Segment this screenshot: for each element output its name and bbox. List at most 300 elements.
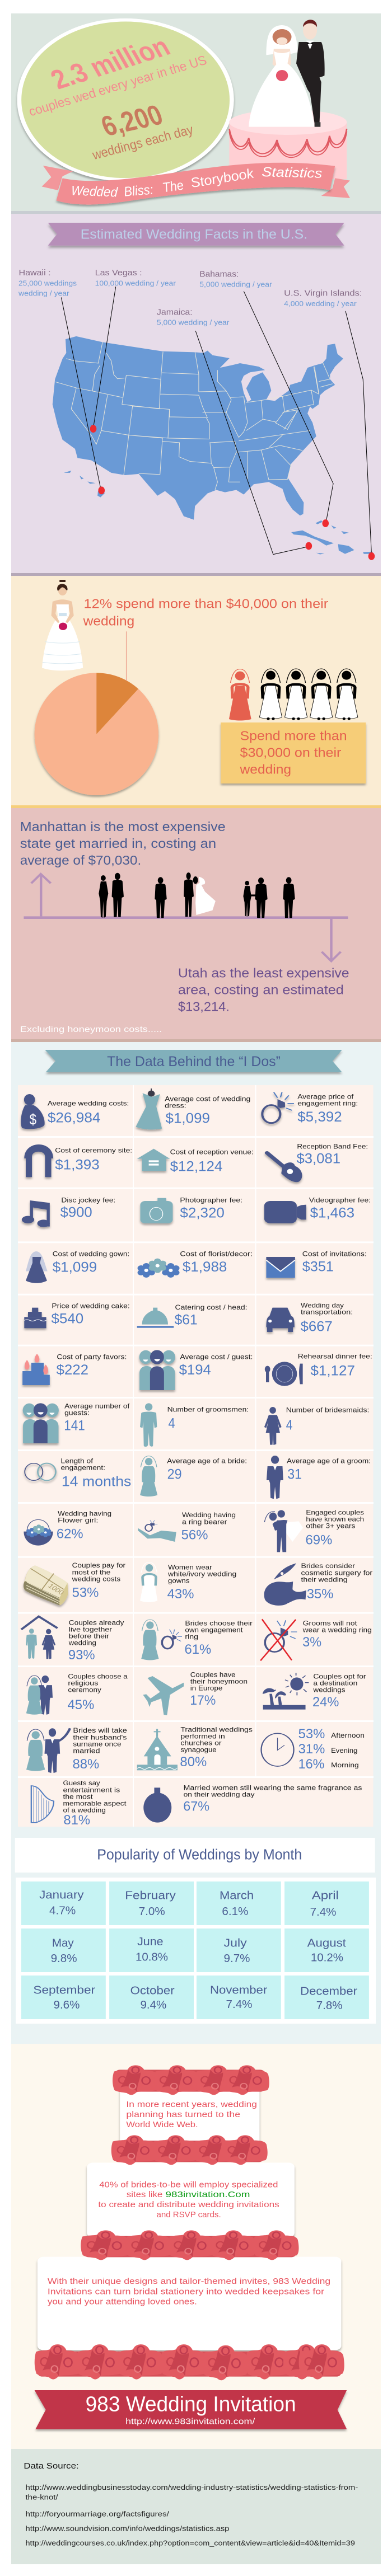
cell: age of groom <box>267 1456 371 1499</box>
cell: grooms no ring <box>260 1619 372 1660</box>
rose trim row 3 <box>81 2230 299 2260</box>
cell: ceremony site: $1,393 <box>55 1157 100 1172</box>
cake tier 2: 983invitation.Com <box>166 2189 250 2199</box>
icon: crossed-out ring <box>260 1619 297 1660</box>
callout: U.S. Virgin Islands: 4,000 wedding / year <box>284 299 357 308</box>
cell: religious ceremony: ceremony <box>68 1687 101 1693</box>
icon: envelope <box>266 1257 295 1278</box>
heading: popularity by month <box>15 1838 375 1873</box>
cell: couples pay: Couples pay for <box>72 1562 126 1569</box>
panel: most and least expensive <box>11 808 381 1042</box>
cell: wedding gown <box>26 1250 129 1283</box>
cell: rehearsal dinner: $1,127 <box>310 1363 355 1378</box>
icon: arch <box>24 1144 53 1177</box>
table: months: September <box>33 1984 95 1996</box>
cake tier 1 <box>120 2078 259 2145</box>
rose trim row 4 <box>35 2344 344 2380</box>
rose trim row 2 <box>111 2135 268 2165</box>
brand banner <box>35 2390 347 2429</box>
icon: video camera <box>264 1201 306 1223</box>
cell: time of day <box>262 1726 365 1772</box>
table: months: February <box>125 1889 176 1902</box>
source links <box>26 2484 358 2547</box>
panel: data behind the I Dos: Catering cost / head: <box>175 1304 248 1311</box>
cell: transportation: transportation: <box>301 1308 353 1316</box>
icon: harp <box>31 1786 54 1823</box>
cell: honeymoon in Europe: 17% <box>190 1693 216 1708</box>
cell: churches or synagogue: performed in <box>180 1733 225 1740</box>
cell: disc jockey: Disc jockey fee: <box>61 1196 115 1204</box>
cell: honeymoon in Europe: their honeymoon <box>190 1678 248 1685</box>
cell: couples pay: most of the <box>72 1569 111 1576</box>
cell: florist: $1,988 <box>183 1259 227 1275</box>
table: months: 9.6% <box>54 1998 80 2011</box>
icon: man <box>140 1403 157 1447</box>
cell: invitations: $351 <box>302 1259 334 1274</box>
panel: data behind the I Dos <box>11 1042 381 2044</box>
table: months: 7.4% <box>310 1906 336 1918</box>
cell: rehearsal dinner <box>265 1353 372 1386</box>
cell: bridesmaids <box>264 1406 369 1445</box>
cell: live together <box>21 1616 124 1663</box>
cell: religious ceremony <box>26 1673 128 1715</box>
table: months: January <box>39 1889 84 1902</box>
cell: destination wedding <box>263 1673 366 1710</box>
cell: engagement ring: Average price of <box>297 1093 353 1100</box>
cell: reception venue <box>137 1148 254 1175</box>
callout: Bahamas <box>199 270 333 527</box>
icon: couple under roof <box>21 1616 58 1659</box>
cell: videographer <box>264 1196 371 1223</box>
cell: time of day: Evening <box>331 1747 357 1754</box>
cell: fragrance: on their wedding day <box>184 1791 255 1798</box>
cell: party favors: $222 <box>56 1362 88 1378</box>
cell: videographer: Videographer fee: <box>309 1196 371 1204</box>
cost line with arrows <box>24 874 348 961</box>
cell: wedding gown: $1,099 <box>53 1260 97 1275</box>
cell: catering: $61 <box>175 1312 198 1327</box>
callout: Hawaii <box>18 269 105 494</box>
table: months: December <box>300 1985 357 1997</box>
cell: time of day: 16% <box>298 1757 324 1772</box>
cell: groomsmen: 4 <box>168 1416 175 1432</box>
icon: music note <box>22 1200 50 1227</box>
cell: couples pay: 53% <box>72 1585 99 1600</box>
cell: entertainment: entertainment is <box>63 1786 120 1794</box>
cell: entertainment: 81% <box>63 1813 90 1828</box>
icon: bride figures <box>229 669 358 720</box>
panel: data behind the I Dos: Price of wedding cake: <box>52 1302 130 1310</box>
cell: cost per guest <box>139 1350 253 1390</box>
callout: Bahamas: Bahamas: <box>199 270 239 279</box>
cake tier 2: to create and distribute wedding invitations <box>98 2199 279 2209</box>
cell: known each other: Engaged couples <box>306 1509 364 1516</box>
cell: take surname: married <box>73 1747 100 1754</box>
cell: videographer: $1,463 <box>310 1205 354 1221</box>
icon: house <box>137 1149 170 1171</box>
cell: destination wedding: 24% <box>312 1695 339 1710</box>
cell: couples pay <box>24 1562 126 1606</box>
cell: ring bearer: 56% <box>181 1528 208 1543</box>
table: months: 7.4% <box>226 1998 252 2011</box>
cell: number of guests: guests: <box>64 1410 90 1416</box>
heading: data source: Data Source: <box>24 2461 79 2470</box>
cake tier 1: In more recent years, wedding <box>126 2099 257 2109</box>
cell: live together: wedding <box>68 1640 96 1646</box>
cell: wedding cake <box>24 1308 83 1328</box>
text: Manhattan: state get married in, costing an <box>20 836 216 851</box>
cell: white gowns: Women wear <box>168 1564 212 1571</box>
brand banner: http://www.983invitation.com/ <box>125 2417 255 2426</box>
cell: churches or synagogue: synagogue <box>180 1747 217 1753</box>
panel: data source <box>11 2449 381 2564</box>
cell: disc jockey: $900 <box>60 1204 92 1220</box>
cell: transportation <box>266 1308 353 1335</box>
cell: white gowns: gowns <box>168 1577 190 1584</box>
title ribbon: Statistics <box>262 165 323 181</box>
cell: flower girl: 62% <box>57 1526 83 1541</box>
icon: groom carrying bride <box>264 1510 303 1552</box>
icon: church <box>137 1729 178 1770</box>
cell: florist: Cost of florist/decor: <box>180 1250 253 1257</box>
cake tier 2: and RSVP cards. <box>156 2209 221 2219</box>
cell: cosmetic surgery: Brides consider <box>301 1563 355 1570</box>
table: months: August <box>307 1937 346 1949</box>
cell: reception band <box>267 1143 368 1182</box>
cell: ring bearer: Wedding having <box>182 1512 236 1519</box>
icon: sun and palm trees <box>263 1673 309 1710</box>
cell: known each other: have known each <box>306 1515 364 1523</box>
icon: money bag: $ <box>30 1111 37 1128</box>
cell: flower girl: Wedding having <box>58 1510 111 1517</box>
icon: bride in white <box>140 1563 157 1602</box>
bride topper <box>249 25 315 127</box>
brand banner: 983 Wedding Invitation <box>86 2392 296 2416</box>
cell: photographer <box>140 1196 242 1223</box>
cell: churches or synagogue: churches or <box>180 1739 222 1747</box>
cake tier 2: 40% of brides-to-be will employ specialized <box>99 2180 278 2189</box>
cell: wedding cake: $540 <box>52 1311 83 1326</box>
cell: cost per guest: $194 <box>179 1362 211 1378</box>
icon: bundle of money <box>24 1565 68 1606</box>
cell: disc jockey <box>22 1196 115 1227</box>
cell: ring bearer: a ring bearer <box>182 1518 227 1526</box>
panel: hero <box>11 13 381 214</box>
cell: take surname: Brides will take <box>73 1727 127 1734</box>
source links: http://foryourmarriage.org/factsfigures/ <box>26 2511 170 2518</box>
source links: the-knot/ <box>26 2494 58 2502</box>
cell: white gowns: 43% <box>167 1587 194 1602</box>
cell: reception venue: $12,124 <box>170 1159 222 1175</box>
table: months: 9.8% <box>51 1952 77 1965</box>
icon: hand with ring <box>138 1521 176 1542</box>
callout: Hawaii: Hawaii : <box>18 269 51 278</box>
cell: length of engagement: engagement: <box>60 1465 105 1471</box>
cell: time of day: 31% <box>298 1742 325 1757</box>
pie chart <box>35 673 158 795</box>
cell: couples pay: wedding costs <box>72 1575 120 1583</box>
cell: length of engagement: Length of <box>60 1457 93 1465</box>
cell: grooms no ring: wear a wedding ring <box>302 1627 372 1634</box>
cell: churches or synagogue <box>137 1726 253 1770</box>
icon: bride in white gown <box>42 580 83 670</box>
cell: cost per guest: Average cost / guest: <box>180 1353 253 1360</box>
cell: invitations: Cost of invitations: <box>302 1250 367 1257</box>
cell: transportation: $667 <box>301 1319 333 1335</box>
icon: car <box>266 1308 295 1332</box>
leader line <box>125 631 127 681</box>
cell: wedding dress: Average cost of wedding <box>165 1095 250 1102</box>
title ribbon: Storybook <box>189 166 256 191</box>
cell: take surname: 88% <box>72 1757 99 1772</box>
cell: average wedding costs: $26,984 <box>48 1110 100 1125</box>
title ribbon <box>42 163 350 205</box>
cake tier 2 <box>87 2162 295 2237</box>
cell: ceremony site <box>24 1144 132 1177</box>
table: months: July <box>224 1937 247 1949</box>
callout: Hawaii: wedding / year <box>18 289 69 297</box>
table: months: 10.8% <box>136 1951 168 1963</box>
panel: data behind the I Dos: Wedding day <box>301 1302 344 1309</box>
table: months: 4.7% <box>49 1904 76 1917</box>
cell: catering <box>137 1308 198 1328</box>
cell: religious ceremony: 45% <box>68 1697 94 1712</box>
cell: entertainment: the most <box>63 1793 93 1800</box>
callout: Jamaica: 5,000 wedding / year <box>157 318 230 326</box>
icon: clock <box>262 1733 294 1766</box>
cell: time of day: Afternoon <box>331 1732 365 1739</box>
cell: party favors <box>22 1353 127 1385</box>
callout: Las Vegas: 100,000 wedding / year <box>95 279 176 287</box>
rose trim row 1 <box>113 2065 269 2095</box>
cell: take surname: surname once <box>73 1740 122 1748</box>
cell: live together: live together <box>69 1626 112 1633</box>
icon: cake <box>24 1308 46 1328</box>
cell: entertainment: memorable aspect <box>63 1800 127 1807</box>
icon: dress <box>136 1088 162 1129</box>
cell: destination wedding: Couples opt for <box>313 1673 366 1680</box>
cell: ring bearer <box>138 1512 236 1543</box>
table: months: 9.4% <box>140 1998 166 2011</box>
cake tier 1: World Wide Web. <box>126 2119 198 2129</box>
cell: entertainment: of a wedding <box>63 1807 106 1814</box>
cell: choose own ring <box>141 1620 253 1660</box>
cell: age of bride <box>140 1456 247 1496</box>
cell: live together: Couples already <box>69 1619 124 1626</box>
note: excluding honeymoon: Excluding honeymoon costs..... <box>20 1024 162 1034</box>
icon: plane <box>143 1676 184 1715</box>
US map <box>53 336 372 555</box>
cell: number of guests: 141 <box>64 1418 85 1434</box>
icon: couple arms raised <box>26 1728 70 1773</box>
cell: cosmetic surgery: 35% <box>307 1587 334 1602</box>
icon: camera <box>140 1198 172 1223</box>
table: months: June <box>137 1935 164 1948</box>
cell: reception band: $3,081 <box>296 1151 340 1167</box>
table: months: April <box>312 1889 339 1902</box>
icon: bride and groom <box>26 1676 53 1715</box>
panel: wedding facts map <box>11 214 381 576</box>
stat circle <box>19 20 232 180</box>
icon: wedding bands <box>25 1463 56 1480</box>
cell: choose own ring: Brides choose their <box>185 1620 253 1627</box>
cell: churches or synagogue: 80% <box>180 1754 207 1770</box>
text: Manhattan: average of $70,030. <box>20 853 141 867</box>
silhouettes: wedding guests and couple <box>99 872 295 918</box>
cell: white gowns <box>140 1563 236 1602</box>
table: months: May <box>52 1937 74 1949</box>
cell: florist <box>138 1250 253 1278</box>
cell: take surname: their husband's <box>73 1734 127 1741</box>
cake <box>229 110 347 179</box>
cell: rehearsal dinner: Rehearsal dinner fee: <box>298 1353 372 1360</box>
cell: entertainment: Guests say <box>63 1780 100 1787</box>
cell: flower girl <box>24 1510 111 1546</box>
cell: ceremony site: Cost of ceremony site: <box>55 1147 132 1154</box>
icon: bundle of money: 1000 <box>46 1583 66 1596</box>
cell: grooms no ring: 3% <box>302 1635 321 1650</box>
icon: groom <box>267 1456 283 1499</box>
cell: fragrance: 67% <box>183 1799 209 1814</box>
cell: choose own ring: 61% <box>184 1642 211 1657</box>
cell: party favors: Cost of party favors: <box>57 1353 127 1360</box>
cell: cosmetic surgery: cosmetic surgery for <box>301 1569 373 1576</box>
callout box: 30,000: Spend more than <box>240 729 347 743</box>
cell: length of engagement <box>25 1457 131 1489</box>
callout: U.S. Virgin Islands <box>284 289 375 560</box>
cell: live together: 93% <box>68 1648 95 1663</box>
cell: age of groom: Average age of a groom: <box>287 1457 371 1465</box>
cell: reception venue: Cost of reception venue: <box>170 1148 254 1156</box>
cake tier 3 <box>38 2257 341 2350</box>
stat circle: 6,200 <box>97 99 167 142</box>
text: Manhattan <box>20 819 226 867</box>
icon: candles <box>22 1354 50 1385</box>
cell: flower girl: Flower girl: <box>58 1517 98 1524</box>
cell: honeymoon in Europe: in Europe <box>190 1685 223 1692</box>
icon: guests <box>23 1403 59 1443</box>
cell: engagement ring: $5,392 <box>297 1109 342 1125</box>
table: months <box>16 1878 376 2024</box>
text: 12 percent: wedding <box>83 613 134 628</box>
cell: live together: before their <box>69 1632 110 1640</box>
cake tier 3: With their unique designs and tailor-themed invites, 983 Wedding <box>48 2276 330 2286</box>
cell: age of bride: 29 <box>167 1467 182 1482</box>
text: Utah <box>178 966 349 1014</box>
icon: flower basket <box>24 1519 53 1546</box>
heading banner: Estimated Wedding Facts in the U.S. <box>81 227 307 242</box>
text: Utah: area, costing an estimated <box>178 983 344 997</box>
title ribbon: Wedded <box>71 183 119 200</box>
panel: spending <box>11 576 381 808</box>
cell: bridesmaids: Number of bridesmaids: <box>286 1406 369 1414</box>
text: 12 percent: 12% spend more than $40,000 on their <box>84 597 328 611</box>
cell: age of groom: 31 <box>287 1467 302 1482</box>
cell: engagement ring: engagement ring: <box>297 1100 358 1107</box>
callout: U.S. Virgin Islands: U.S. Virgin Islands: <box>284 289 362 298</box>
cell: honeymoon in Europe <box>143 1671 248 1715</box>
icon: perfume bottle <box>143 1787 171 1823</box>
table: months: October <box>130 1984 175 1997</box>
cell: known each other <box>264 1509 364 1552</box>
source links: http://www.soundvision.com/info/weddings/statistics.asp <box>26 2525 229 2533</box>
icon: cosmetic surgery <box>264 1563 306 1606</box>
cake tier 1: planning has turned to the <box>126 2109 240 2119</box>
cell: fragrance <box>143 1784 362 1823</box>
cell: cosmetic surgery <box>264 1563 373 1606</box>
cake tier 3: you and your attending loved ones. <box>48 2297 197 2306</box>
stat circle: couples wed every year in the US <box>26 53 209 119</box>
cell: average wedding costs: Average wedding costs: <box>48 1100 129 1107</box>
cell: engagement ring <box>262 1092 358 1125</box>
cell: honeymoon in Europe: Couples have <box>190 1671 236 1678</box>
cell: invitations <box>266 1250 367 1278</box>
callout: Bahamas: 5,000 wedding / year <box>199 280 272 289</box>
text: Utah: $13,214. <box>178 1000 230 1014</box>
table: months: 10.2% <box>311 1951 343 1964</box>
cell: take surname <box>26 1727 127 1773</box>
heading banner: The Data Behind the “I Dos” <box>107 1054 281 1069</box>
table: months: 9.7% <box>224 1952 250 1965</box>
heading banner <box>48 223 344 246</box>
callout: Las Vegas: Las Vegas : <box>95 269 142 278</box>
cell: white gowns: white/ivory wedding <box>167 1570 236 1578</box>
title ribbon: Bliss: <box>123 182 155 200</box>
callout: Las Vegas <box>90 269 176 433</box>
table: months: March <box>220 1889 254 1902</box>
stat circle: weddings each day <box>89 122 197 162</box>
cell: religious ceremony: Couples choose a <box>68 1673 128 1680</box>
cell: choose own ring: own engagement <box>185 1627 243 1634</box>
icon: bride <box>140 1456 157 1496</box>
icon: ring <box>262 1092 294 1123</box>
cell: cosmetic surgery: their wedding <box>301 1576 348 1583</box>
cell: wedding dress: dress: <box>165 1102 186 1109</box>
table: months: 7.0% <box>139 1905 165 1918</box>
cell: photographer: $2,320 <box>180 1205 225 1221</box>
icon: woman <box>264 1407 282 1445</box>
cell: length of engagement: 14 months <box>62 1474 131 1489</box>
text: Utah: Utah as the least expensive <box>178 966 349 980</box>
callout box: 30,000: wedding <box>240 762 291 777</box>
icon: cloche <box>137 1308 174 1328</box>
callout: Jamaica: Jamaica: <box>157 308 193 317</box>
cell: wedding dress: $1,099 <box>166 1111 210 1127</box>
text: 12 percent <box>83 597 328 628</box>
cell: known each other: 69% <box>306 1532 332 1547</box>
cake tier 3: Invitations can turn bridal stationery into wedded keepsakes for <box>48 2287 324 2296</box>
cell: grooms no ring: Grooms will not <box>303 1620 357 1627</box>
icon: flowers <box>138 1259 180 1278</box>
stat circle: 2.3 million <box>45 31 175 95</box>
groom topper <box>296 20 325 127</box>
callout box: 30,000 <box>221 722 366 783</box>
cell: bridesmaids: 4 <box>286 1418 292 1433</box>
heading banner <box>45 1050 342 1072</box>
cell: entertainment <box>31 1780 127 1828</box>
cell: destination wedding: a destination <box>313 1680 357 1687</box>
cell: religious ceremony: religious <box>68 1680 99 1687</box>
icon: guests <box>139 1350 175 1390</box>
icon: guitar <box>267 1153 302 1182</box>
callout: Hawaii: 25,000 weddings <box>18 279 77 287</box>
cell: wedding dress <box>136 1088 250 1129</box>
cell: choose own ring: ring <box>185 1634 198 1640</box>
panel: cake and invitation <box>11 2044 381 2449</box>
cell: reception band: Reception Band Fee: <box>297 1143 368 1150</box>
cell: average wedding costs <box>21 1094 129 1129</box>
callout: Jamaica <box>157 308 312 555</box>
